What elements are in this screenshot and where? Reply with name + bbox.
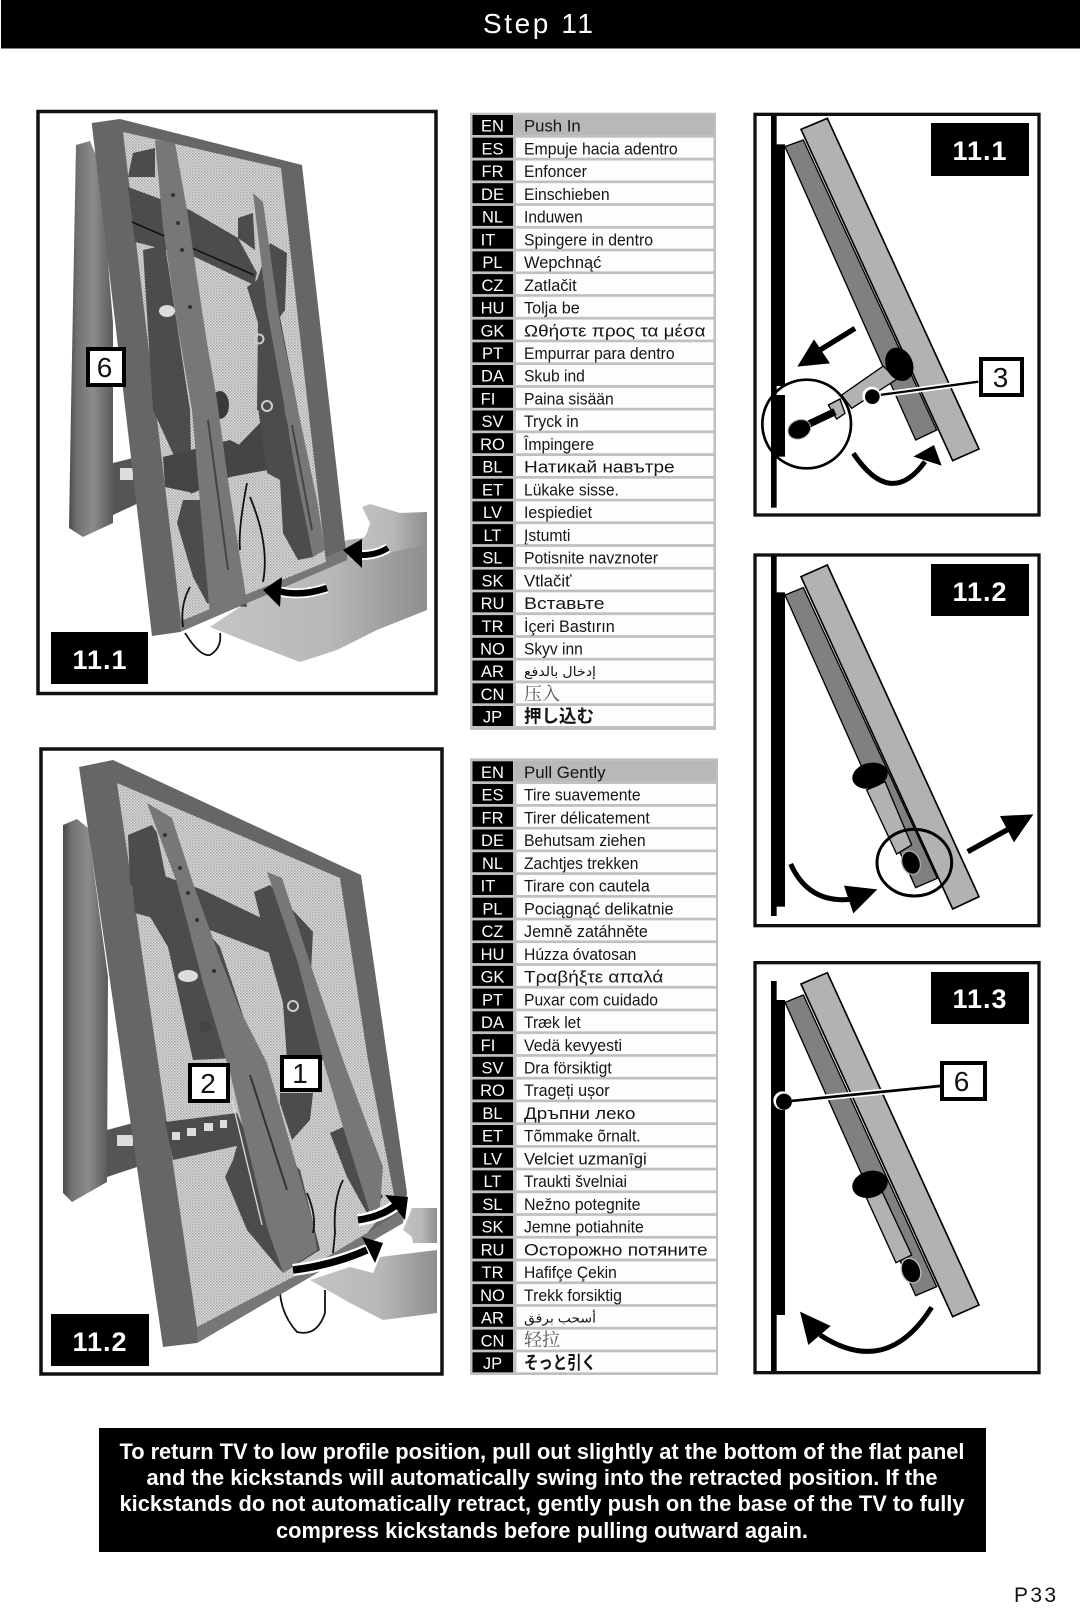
row ES: Tire suavemente (524, 786, 641, 805)
callout circle (877, 829, 952, 896)
row FI: FI (481, 390, 495, 408)
row NL: Induwen (524, 208, 583, 227)
row PT (472, 342, 714, 363)
row SK: SK (481, 572, 504, 590)
row GK (472, 966, 716, 987)
row SL: Potisnite navznoter (524, 549, 658, 568)
row LV (472, 1148, 716, 1168)
row FR (472, 160, 714, 181)
kickstand (69, 141, 113, 537)
flat panel back (79, 760, 407, 1347)
row ET: ET (482, 481, 503, 499)
panel: diagram 11.2 (755, 555, 1039, 926)
wall rail (113, 455, 145, 515)
row BL: BL (482, 1105, 503, 1123)
row EN (472, 761, 606, 782)
label: 11.1: 11.1 (952, 136, 1008, 166)
row PL (472, 251, 714, 272)
row DA: Træk let (524, 1013, 581, 1032)
row CN: CN (481, 686, 504, 704)
row SL: Nežno potegnite (524, 1195, 641, 1214)
row ET (472, 1125, 716, 1146)
arrow: curved swing (791, 864, 877, 913)
row RU: Вставьте (524, 594, 604, 613)
row ET: Lükake sisse. (524, 480, 619, 499)
row HU (472, 297, 714, 318)
row RU (472, 1239, 716, 1259)
row DE: DE (481, 832, 504, 850)
row CZ: CZ (482, 923, 504, 941)
wall rail (107, 1123, 137, 1177)
row GK (472, 320, 714, 340)
row BL: Дръпни леко (524, 1104, 635, 1123)
row ET (472, 479, 714, 499)
row LT: Įstumti (524, 526, 570, 545)
callout: return instructions: kickstands do not automatically retract, gently push on the base of the TV to fully (120, 1491, 965, 1516)
row RO: Împingere (523, 435, 594, 454)
row RO: RO (480, 1082, 505, 1100)
panel: photo 11.2 pull gently (41, 749, 442, 1374)
row IT (472, 875, 716, 896)
row GK: GK (481, 969, 504, 987)
label: 11.2: 11.2 (952, 577, 1008, 607)
row IT: IT (481, 231, 495, 249)
row AR (472, 660, 714, 681)
row NO: Trekk forsiktig (524, 1286, 622, 1305)
row PT: Puxar com cuidado (524, 990, 658, 1009)
row AR: AR (481, 663, 504, 681)
label: 11.2: 11.2 (72, 1327, 128, 1357)
row PT: PT (482, 991, 503, 1009)
row DA (472, 1011, 716, 1032)
row NL: NL (482, 855, 503, 873)
arrow: push in (263, 539, 388, 607)
title: Step 11 (483, 8, 593, 39)
row CN: CN (481, 1332, 504, 1350)
row ET: ET (482, 1128, 503, 1146)
row NL: NL (482, 209, 503, 227)
row PL: Wepchnąć (524, 253, 602, 272)
mount brackets (128, 803, 383, 1273)
row EN: EN (481, 118, 504, 136)
row CZ: CZ (482, 277, 504, 295)
row CZ (472, 920, 716, 941)
label: part 3 (981, 359, 1022, 395)
row DA (472, 365, 714, 386)
row PL: PL (482, 900, 503, 918)
row LV: Velciet uzmanīgi (524, 1149, 647, 1168)
row NL: Zachtjes trekken (524, 854, 638, 873)
label: part 2 (190, 1065, 228, 1101)
row JP: JP (483, 709, 502, 727)
row NO (472, 638, 714, 658)
callout: return instructions (99, 1428, 986, 1552)
label: part 6: 6 (954, 1066, 969, 1097)
row LT: Traukti švelniai (524, 1172, 627, 1191)
row SL (472, 547, 714, 568)
row BL: BL (482, 459, 503, 477)
row RO (472, 1080, 716, 1100)
row GK: GK (481, 322, 504, 340)
kickstand (63, 819, 108, 1202)
row JP (472, 1352, 716, 1373)
arrow: curved swing (853, 445, 942, 483)
row ES: ES (481, 787, 504, 805)
row EN: EN (481, 764, 504, 782)
row SL: SL (482, 1196, 503, 1214)
callout: return instructions: compress kickstands before pulling outward again. (276, 1518, 808, 1543)
row LT: LT (483, 1173, 502, 1191)
row SL (472, 1193, 716, 1214)
row FR: Tirer délicatement (524, 808, 650, 827)
panel: photo 11.1 push in (38, 112, 436, 694)
label: part 1 (282, 1057, 320, 1090)
row SK: Jemne potiahnite (524, 1218, 644, 1237)
arrow: curved swing (800, 1307, 932, 1351)
row HU (472, 943, 716, 964)
row PT: Empurrar para dentro (524, 344, 675, 363)
row RU: RU (481, 595, 504, 613)
row SK: SK (481, 1219, 504, 1237)
label: part 1: 1 (292, 1058, 308, 1089)
table: Push In translations (470, 113, 716, 730)
row FI (472, 1034, 716, 1055)
mount brackets (128, 140, 325, 627)
row HU: HU (481, 299, 504, 317)
label: 11.3 (931, 972, 1029, 1024)
label: part 6 (88, 349, 124, 385)
row SV (472, 1057, 716, 1078)
row LT (472, 524, 714, 545)
row GK: Ωθήστε προς τα μέσα (524, 321, 706, 340)
row ES (472, 138, 714, 158)
row EN (472, 115, 581, 136)
row TR: İçeri Bastırın (524, 617, 615, 636)
row FR: FR (482, 163, 504, 181)
row SV (472, 410, 714, 431)
row NO: NO (480, 1287, 505, 1305)
row NO (472, 1284, 716, 1305)
row FR (472, 807, 716, 828)
row CZ: Jemně zatáhněte (524, 922, 648, 941)
row DE: Einschieben (524, 185, 610, 204)
row RU (472, 592, 714, 613)
arrow: pull out (293, 1195, 408, 1270)
row CN (472, 680, 714, 706)
row SK (472, 570, 714, 590)
row LV: LV (483, 504, 502, 522)
row PL: PL (482, 254, 503, 272)
row AR: AR (481, 1310, 504, 1328)
callout: return instructions: To return TV to low profile position, pull out slightly at the bottom of the flat panel (120, 1439, 964, 1464)
panel: diagram 11.1 (755, 114, 1039, 515)
table: Pull Gently translations (470, 758, 718, 1375)
flat panel back (92, 119, 347, 636)
row CN: 压入 (524, 680, 560, 706)
label: part 2: 2 (200, 1068, 216, 1099)
row NL (472, 206, 714, 227)
label: 11.1: 11.1 (72, 645, 128, 675)
pointer to part 6 (773, 1086, 940, 1110)
row SV: SV (481, 413, 504, 431)
arrow: down-left (797, 328, 855, 367)
row ES (472, 784, 716, 805)
row IT: Spingere in dentro (524, 230, 653, 249)
arrow: up-right (968, 814, 1033, 852)
row GK: Τραβήξτε απαλά (524, 968, 663, 987)
row DA: DA (481, 1014, 504, 1032)
row DE: DE (481, 186, 504, 204)
row EN: Push In (524, 117, 581, 136)
row FI (472, 388, 714, 408)
row HU: Húzza óvatosan (524, 945, 636, 964)
row ES: ES (481, 140, 504, 158)
row ES: Empuje hacia adentro (524, 139, 678, 158)
row DA: Skub ind (524, 367, 585, 386)
row NO: Skyv inn (524, 639, 583, 658)
row CN: 轻拉 (524, 1326, 560, 1352)
row AR: أسحب برفق (524, 1310, 596, 1327)
row DE (472, 183, 714, 204)
row DE (472, 830, 716, 850)
row HU: Tolja be (524, 298, 580, 317)
label: 11.1 (931, 123, 1029, 176)
row LT (472, 1170, 716, 1191)
row TR (472, 1261, 716, 1282)
row FI: Vedä kevyesti (524, 1036, 622, 1055)
label: part 3: 3 (993, 362, 1008, 393)
label: 11.1 (51, 632, 148, 684)
row TR: TR (482, 618, 504, 636)
row JP (472, 706, 714, 727)
row RO: RO (480, 436, 505, 454)
row FI: FI (481, 1037, 495, 1055)
row SV: Dra försiktigt (524, 1059, 612, 1078)
label: part 6: 6 (97, 352, 112, 383)
row CZ (472, 274, 714, 295)
panel: diagram 11.3 (755, 963, 1039, 1373)
row IT: IT (481, 878, 495, 896)
row AR (472, 1307, 716, 1328)
row LV: LV (483, 1150, 502, 1168)
callout circle (762, 380, 851, 468)
row SK: Vtlačiť (524, 571, 572, 590)
row LV: Iespiediet (524, 503, 592, 522)
callout: return instructions: and the kickstands will automatically swing into the retracted position. If the (146, 1465, 938, 1490)
row DA: DA (481, 368, 504, 386)
label: 11.2 (51, 1314, 149, 1366)
row PT: PT (482, 345, 503, 363)
row SK (472, 1216, 716, 1237)
header bar (1, 0, 1080, 48)
row DE: Behutsam ziehen (524, 831, 646, 850)
row RU: RU (481, 1241, 504, 1259)
row BL (472, 1102, 716, 1123)
row SL: SL (482, 550, 503, 568)
row ET: Tõmmake õrnalt. (524, 1127, 641, 1146)
row EN: Pull Gently (524, 763, 606, 782)
row JP: 押し込む (524, 707, 594, 727)
row IT (472, 229, 714, 249)
row RU: Осторожно потяните (524, 1240, 708, 1259)
row JP: JP (483, 1355, 502, 1373)
row BL: Натикай навътре (524, 458, 675, 477)
row RO: Trageți ușor (524, 1081, 610, 1100)
row TR (472, 615, 714, 636)
hands (185, 504, 427, 662)
label: 11.2 (931, 564, 1029, 616)
row PL (472, 898, 716, 918)
hands (280, 1208, 437, 1333)
row CZ: Zatlačit (524, 276, 577, 295)
row AR: إدخال بالدفع (524, 664, 596, 680)
row FR: Enfoncer (524, 162, 587, 181)
row BL (472, 456, 714, 477)
row SV: Tryck in (524, 412, 579, 431)
pointer to part 3 (862, 382, 978, 405)
label: part 6 (942, 1063, 985, 1099)
row IT: Tirare con cautela (524, 877, 650, 896)
row FR: FR (482, 809, 504, 827)
row NL (472, 852, 716, 873)
row HU: HU (481, 946, 504, 964)
row LV (472, 501, 714, 522)
page number: P33 (1014, 1584, 1056, 1607)
row TR: TR (482, 1264, 504, 1282)
row TR: Hafifçe Çekin (524, 1263, 617, 1282)
row JP: そっと引く (524, 1353, 596, 1373)
row NO: NO (480, 640, 505, 658)
row RO (472, 433, 714, 454)
label: 11.3: 11.3 (952, 984, 1008, 1014)
row PT (472, 989, 716, 1009)
row CN (472, 1326, 716, 1352)
row SV: SV (481, 1060, 504, 1078)
row FI: Paina sisään (524, 389, 614, 408)
row LT: LT (483, 527, 502, 545)
row PL: Pociągnąć delikatnie (524, 899, 674, 918)
